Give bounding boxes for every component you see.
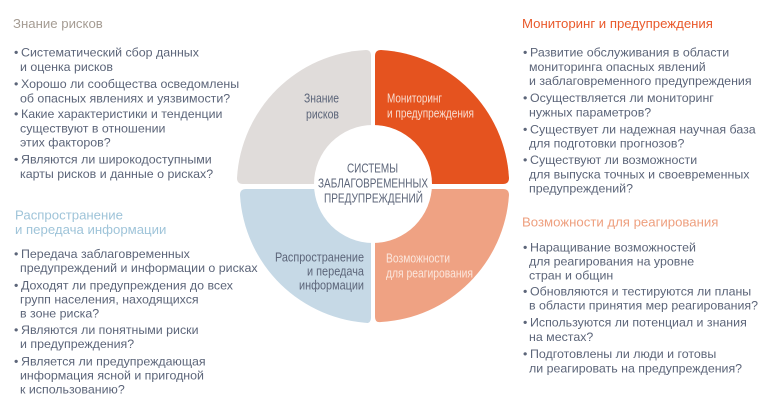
text block: monitoring bullets: нужных параметров?	[529, 106, 651, 120]
quadrant: dissemination and communication: информации	[299, 278, 364, 292]
text block: risk knowledge bullets: Какие характеристики и тенденции	[21, 107, 223, 121]
text block: risk knowledge bullets: •	[14, 77, 18, 91]
text block: monitoring bullets: для подготовки прогнозов?	[529, 136, 684, 150]
text block: dissemination bullets: •	[14, 247, 18, 261]
text block: monitoring bullets: •	[523, 153, 527, 167]
quadrant: response capability	[375, 189, 509, 322]
text block: monitoring bullets: Развитие обслуживания в области	[530, 46, 729, 60]
text block: monitoring bullets: •	[523, 46, 527, 60]
text block: dissemination bullets: групп населения, находящихся	[20, 292, 199, 306]
text block: response bullets: •	[523, 316, 527, 330]
text block: monitoring bullets: Осуществляется ли мониторинг	[530, 91, 714, 105]
text block: response bullets: Наращивание возможностей	[530, 240, 696, 254]
text block: risk knowledge bullets: существуют в отношении	[20, 122, 165, 136]
heading: monitoring and warning: Мониторинг и предупреждения	[522, 16, 713, 31]
text block: response bullets: •	[523, 347, 527, 361]
text block: dissemination bullets	[14, 247, 258, 396]
text block: risk knowledge bullets: карты рисков и данные о рисках?	[20, 167, 213, 181]
center circle: early warning systems: ПРЕДУПРЕЖДЕНИЙ	[324, 190, 423, 206]
heading: dissemination and communication: Распространение	[15, 208, 123, 222]
text block: response bullets: Подготовлены ли люди и готовы	[530, 347, 716, 361]
center circle: early warning systems	[314, 125, 432, 243]
quadrant: monitoring and warning: Мониторинг	[387, 92, 442, 106]
text block: monitoring bullets	[523, 46, 756, 196]
quadrant: response capability: Возможности	[386, 252, 450, 266]
text block: dissemination bullets: предупреждений и информации о рисках	[20, 261, 258, 275]
text block: risk knowledge bullets: Являются ли широкодоступными	[21, 152, 212, 166]
text block: risk knowledge bullets	[14, 46, 239, 181]
text block: dissemination bullets: к использованию?	[20, 382, 125, 396]
text block: risk knowledge bullets: Систематический сбор данных	[21, 46, 200, 60]
center circle: early warning systems: ЗАБЛАГОВРЕМЕННЫХ	[318, 176, 428, 190]
text block: response bullets: Используются ли потенциал и знания	[530, 316, 747, 330]
quadrant: monitoring and warning	[375, 50, 509, 184]
quadrant: risk knowledge	[237, 50, 371, 184]
text block: response bullets: на местах?	[529, 330, 593, 344]
text block: response bullets: для реагирования на уровне	[529, 254, 694, 268]
text block: dissemination bullets: Является ли предупреждающая	[21, 354, 206, 368]
text block: risk knowledge bullets: •	[14, 107, 18, 121]
text block: risk knowledge bullets: Хорошо ли сообщества осведомлены	[21, 77, 239, 91]
text block: monitoring bullets: для выпуска точных и своевременных	[529, 168, 750, 182]
panel: dissemination text	[14, 208, 258, 396]
text block: response bullets: стран и общин	[529, 268, 613, 282]
text block: dissemination bullets: информация ясной и пригодной	[20, 368, 204, 382]
text block: response bullets: •	[523, 284, 527, 298]
text block: dissemination bullets: и предупреждения?	[20, 337, 134, 351]
quadrant: monitoring and warning: и предупреждения	[387, 106, 474, 120]
center circle: early warning systems: СИСТЕМЫ	[347, 160, 398, 176]
heading: response capability: Возможности для реагирования	[522, 214, 718, 230]
heading: dissemination and communication: и передача информации	[15, 222, 166, 237]
text block: response bullets: в области принятия мер реагирования?	[529, 298, 758, 312]
panel: risk knowledge text	[13, 16, 239, 181]
text block: response bullets: •	[523, 240, 527, 254]
text block: risk knowledge bullets: •	[14, 152, 18, 166]
panel: monitoring text	[522, 16, 756, 196]
quadrant: dissemination and communication: Распространение	[275, 250, 364, 264]
heading: risk knowledge: Знание рисков	[13, 16, 103, 31]
panel: response capability text	[522, 214, 758, 376]
text block: dissemination bullets: •	[14, 278, 18, 292]
text block: dissemination bullets: •	[14, 323, 18, 337]
text block: response bullets: ли реагировать на предупреждения?	[529, 362, 742, 376]
text block: monitoring bullets: и заблаговременного предупреждения	[529, 74, 752, 88]
text block: risk knowledge bullets: и оценка рисков	[20, 60, 113, 74]
text block: monitoring bullets: предупреждений?	[529, 182, 633, 196]
text block: risk knowledge bullets: •	[14, 46, 18, 60]
quadrant: response capability: для реагирования	[386, 266, 473, 280]
text block: dissemination bullets: Доходят ли предупреждения до всех	[21, 278, 234, 292]
quadrant: dissemination and communication: и передача	[307, 264, 364, 278]
text block: monitoring bullets: Существуют ли возможности	[530, 153, 697, 167]
text block: response bullets: Обновляются и тестируются ли планы	[530, 284, 751, 298]
text block: dissemination bullets: в зоне риска?	[20, 306, 99, 320]
chart: four-quadrant circle diagram	[237, 50, 509, 323]
text block: risk knowledge bullets: этих факторов?	[20, 136, 111, 150]
text block: monitoring bullets: Существует ли надежная научная база	[530, 122, 756, 136]
text block: response bullets	[523, 240, 758, 376]
text block: dissemination bullets: Являются ли понятными риски	[21, 323, 199, 337]
text block: monitoring bullets: •	[523, 91, 527, 105]
quadrant: dissemination and communication	[240, 189, 371, 323]
quadrant: risk knowledge: рисков	[306, 108, 339, 122]
text block: dissemination bullets: Передача заблаговременных	[21, 247, 191, 261]
text block: monitoring bullets: •	[523, 122, 527, 136]
text block: risk knowledge bullets: об опасных явлениях и уязвимости?	[20, 92, 230, 106]
text block: monitoring bullets: мониторинга опасных явлений	[529, 60, 706, 74]
quadrant: risk knowledge: Знание	[304, 92, 339, 106]
text block: dissemination bullets: •	[14, 354, 18, 368]
